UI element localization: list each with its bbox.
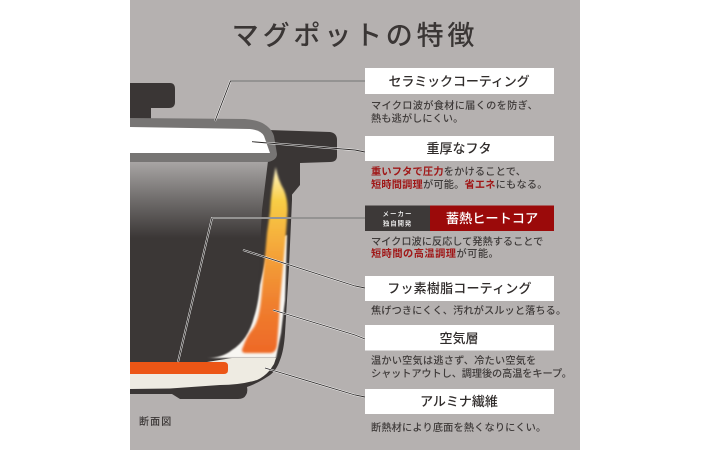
caption: cross-section: 断面図 — [139, 416, 172, 428]
leader: heat core — [178, 218, 365, 362]
feature: heat core — [365, 206, 554, 260]
white air layer — [207, 235, 287, 358]
feature: ceramic coating: マイクロ波が食材に届くのを防ぎ、 — [371, 99, 538, 112]
lid knob — [130, 83, 175, 120]
feature: heat core: 蓄熱ヒートコア — [446, 211, 538, 226]
feature: ceramic coating: 熱も逃がしにくい。 — [371, 112, 463, 125]
feature: fluororesin coating — [365, 276, 566, 317]
leader: fluororesin coating — [243, 250, 365, 288]
feature: heat core: 独自開発 — [383, 218, 412, 228]
leader: ceramic coating — [215, 81, 365, 121]
leader: alumina fiber — [265, 368, 365, 397]
feature: heavy lid: 短時間調理が可能。省エネにもなる。 — [371, 178, 548, 191]
pot cross-section diagram — [130, 83, 337, 399]
feature: fluororesin coating: 焦げつきにくく、汚れがスルッと落ちる。 — [371, 304, 566, 317]
feature: heat core: メーカー — [382, 210, 412, 218]
feature: alumina fiber: 断熱材により底面を熱くなりにくい。 — [371, 421, 546, 434]
feature: air layer: 温かい空気は逃さず、冷たい空気を — [371, 354, 536, 367]
feature: ceramic coating: セラミックコーティング — [388, 74, 530, 89]
leader: heavy lid — [252, 142, 365, 152]
feature: heavy lid: 重いフタで圧力をかけることで、 — [371, 165, 526, 178]
feature: alumina fiber — [365, 389, 554, 434]
feature: fluororesin coating: フッ素樹脂コーティング — [387, 281, 532, 296]
leader lines — [178, 81, 365, 397]
pot lid — [130, 118, 277, 162]
feature: ceramic coating — [365, 68, 554, 125]
feature: air layer — [365, 325, 572, 380]
feature: air layer: シャットアウトし、調理後の高温をキープ。 — [371, 367, 572, 380]
feature: heavy lid: 重厚なフタ — [426, 141, 492, 156]
leader: air layer — [273, 310, 365, 339]
heat core wall — [242, 167, 288, 353]
background panel — [130, 0, 580, 450]
lid white interior — [130, 127, 270, 153]
feature: air layer: 空気層 — [439, 331, 479, 346]
pot interior — [130, 161, 268, 362]
heat core base — [130, 362, 228, 374]
feature: alumina fiber: アルミナ繊維 — [420, 394, 498, 409]
right handle — [262, 130, 337, 215]
feature: heat core: 短時間の高温調理が可能。 — [371, 247, 499, 260]
title: マグポットの特徴 — [232, 21, 478, 51]
feature: heat core: マイクロ波に反応して発熱することで — [371, 235, 543, 248]
insulation base — [130, 358, 276, 389]
pot outer wall and foot — [130, 160, 292, 399]
feature: heavy lid — [365, 136, 554, 191]
